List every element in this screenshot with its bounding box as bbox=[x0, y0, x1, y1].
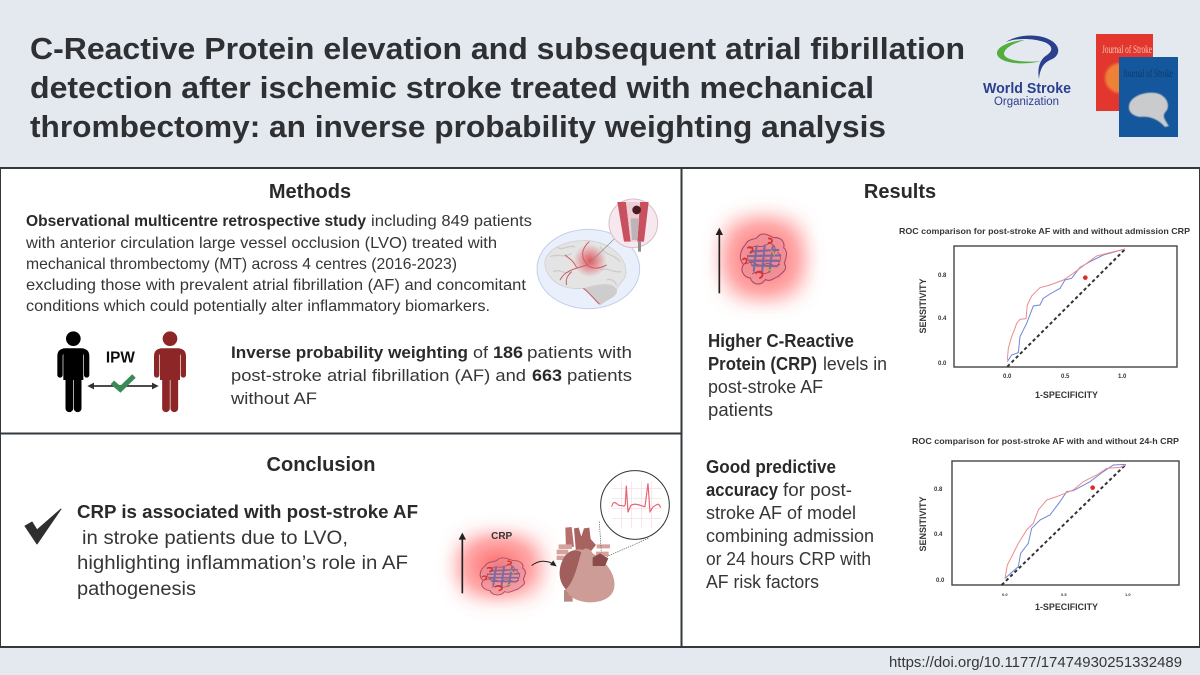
methods study description: Observational multicentre retrospective study bbox=[26, 213, 366, 230]
tick labels: 0.0 bbox=[1002, 592, 1008, 597]
main white panel frame bbox=[0, 168, 1200, 647]
tick labels: 0.4 bbox=[934, 532, 943, 538]
results text: higher CRP: levels in bbox=[823, 354, 887, 374]
methods study description: excluding those with prevalent atrial fibrillation (AF) and concomitant bbox=[26, 277, 527, 294]
icon: inverse probability weighting bbox=[60, 331, 183, 408]
results text: higher CRP: post-stroke AF bbox=[708, 377, 823, 397]
methods heading: Methods bbox=[269, 181, 351, 203]
IPW description bbox=[230, 343, 632, 408]
ROC curves bbox=[1007, 248, 1126, 367]
chart title: ROC comparison for post-stroke AF with and without 24-h CRP bbox=[912, 436, 1179, 446]
conclusion heading: Conclusion bbox=[267, 454, 375, 476]
conclusion text: pathogenesis bbox=[77, 579, 196, 600]
curved arrow to heart bbox=[532, 561, 554, 566]
black patient figure bbox=[60, 331, 87, 408]
logo: World Stroke Organization bbox=[983, 35, 1071, 108]
results text: predictive accuracy: AF risk factors bbox=[706, 572, 819, 592]
IPW description: of bbox=[473, 343, 488, 362]
results text: predictive accuracy: combining admission bbox=[706, 526, 874, 546]
tick labels bbox=[938, 273, 1127, 380]
chart: ROC admission CRP bbox=[899, 226, 1190, 401]
tick labels: 0.8 bbox=[938, 273, 947, 279]
title: detection after ischemic stroke treated with mechanical bbox=[30, 70, 874, 105]
tick labels: 0.0 bbox=[1003, 374, 1012, 380]
conclusion text: highlighting inflammation’s role in AF bbox=[77, 553, 408, 574]
results text: predictive accuracy bbox=[706, 457, 874, 592]
methods study description: with anterior circulation large vessel occlusion (LVO) treated with bbox=[25, 235, 497, 252]
results text: higher CRP: Protein (CRP) bbox=[708, 354, 817, 374]
icon: inverse probability weighting: IPW bbox=[106, 349, 135, 366]
IPW description: 663 bbox=[532, 366, 562, 385]
icon: brain with thrombectomy inset bbox=[537, 199, 658, 309]
title: thrombectomy: an inverse probability weighting analysis bbox=[30, 109, 886, 144]
plot area bbox=[952, 461, 1179, 585]
tick labels: 0.8 bbox=[934, 487, 943, 493]
DOI link text: https://doi.org/10.1177/17474930251332489 bbox=[889, 655, 1182, 671]
conclusion text: CRP is associated with post-stroke AF bbox=[77, 502, 418, 522]
red journal cover: Journal of Stroke bbox=[1102, 42, 1152, 56]
tick labels: 1.0 bbox=[1125, 592, 1131, 597]
ECG inset bbox=[601, 471, 669, 539]
methods study description bbox=[25, 213, 532, 315]
x axis title: 1-SPECIFICITY bbox=[1035, 390, 1099, 401]
heart bbox=[557, 527, 615, 602]
plot area bbox=[954, 246, 1177, 367]
tick labels: 1.0 bbox=[1118, 374, 1127, 380]
IPW description: without AF bbox=[230, 389, 317, 408]
results text: predictive accuracy: for post- bbox=[783, 480, 852, 500]
y axis title: SENSITIVITY bbox=[918, 278, 929, 334]
panel: methods bbox=[25, 181, 658, 408]
tick labels: 0.5 bbox=[1061, 374, 1070, 380]
chart title: ROC comparison for post-stroke AF with and without admission CRP bbox=[899, 226, 1190, 236]
logo: World Stroke Organization: Organization bbox=[994, 96, 1059, 108]
tick labels bbox=[934, 487, 1131, 597]
IPW description: patients bbox=[567, 366, 632, 385]
icon: check mark bbox=[25, 509, 61, 544]
results text: higher CRP bbox=[708, 331, 887, 420]
chart: ROC 24-h CRP bbox=[912, 436, 1179, 613]
IPW description: Inverse probability weighting bbox=[231, 343, 468, 362]
methods study description: conditions which could potentially alter inflammatory biomarkers. bbox=[26, 298, 490, 315]
panel divider: methods and conclusion bbox=[0, 432, 681, 434]
x axis title: 1-SPECIFICITY bbox=[1035, 602, 1099, 613]
panel: results bbox=[706, 181, 1190, 613]
title bbox=[30, 31, 965, 144]
ROC curves bbox=[1002, 464, 1126, 585]
ECG magnifier lines bbox=[599, 522, 648, 557]
results text: predictive accuracy: or 24 hours CRP with bbox=[706, 549, 871, 569]
methods study description: mechanical thrombectomy (MT) across 4 centres (2016-2023) bbox=[26, 256, 457, 273]
red patient figure bbox=[157, 331, 183, 408]
IPW description: patients with bbox=[527, 343, 632, 362]
journal covers bbox=[1096, 34, 1178, 137]
CRP glow and protein: CRP bbox=[491, 531, 513, 542]
results text: predictive accuracy: Good predictive bbox=[706, 457, 836, 477]
panel divider: methods and results bbox=[680, 168, 682, 647]
y axis title: SENSITIVITY bbox=[918, 496, 929, 552]
tick labels: 0.5 bbox=[1061, 592, 1067, 597]
results text: predictive accuracy: stroke AF of model bbox=[706, 503, 856, 523]
tick labels: 0.0 bbox=[936, 578, 945, 584]
panel: conclusion bbox=[25, 454, 669, 610]
IPW description: post-stroke atrial fibrillation (AF) and bbox=[231, 366, 526, 385]
icon: CRP protein to heart with ECG bbox=[442, 471, 669, 610]
conclusion text: in stroke patients due to LVO, bbox=[82, 528, 348, 549]
title: C-Reactive Protein elevation and subsequent atrial fibrillation bbox=[30, 31, 965, 66]
results text: predictive accuracy: accuracy bbox=[706, 480, 778, 500]
logo: World Stroke Organization: World Stroke bbox=[983, 81, 1071, 97]
results text: higher CRP: Higher C-Reactive bbox=[708, 331, 854, 351]
CRP increase arrow bbox=[459, 533, 466, 593]
results text: higher CRP: patients bbox=[708, 400, 773, 420]
tick labels: 0.0 bbox=[938, 361, 947, 367]
conclusion text bbox=[77, 502, 418, 600]
CRP glow and protein bbox=[442, 522, 555, 610]
methods study description: including 849 patients bbox=[371, 213, 532, 230]
results heading: Results bbox=[864, 181, 936, 203]
icon: elevated CRP protein bbox=[706, 202, 821, 315]
tick labels: 0.4 bbox=[938, 316, 947, 322]
IPW description: 186 bbox=[493, 343, 523, 362]
